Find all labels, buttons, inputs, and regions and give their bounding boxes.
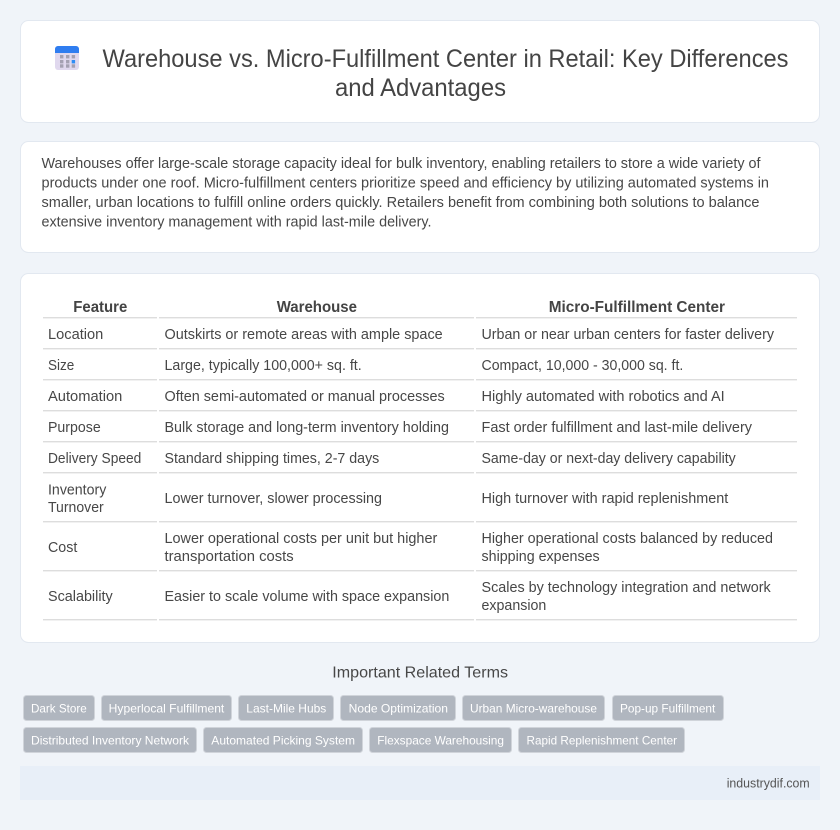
row: scalability: Scalability (48, 589, 113, 605)
icon: calendar grid (55, 46, 79, 70)
tag: automated picking system: Automated Picking System (211, 733, 355, 747)
row: location: Urban or near urban centers for faster delivery (482, 327, 775, 343)
row: delivery speed: Delivery Speed (48, 451, 141, 467)
row: purpose: Fast order fulfillment and last-mile delivery (482, 420, 753, 436)
row: purpose: Purpose (48, 420, 101, 436)
tag: distributed inventory network: Distributed Inventory Network (31, 733, 190, 747)
panel: introduction text: Warehouses offer large-scale storage capacity ideal for bulk inventory, enabling retailers to store a wide variety of (42, 156, 761, 172)
row: location: Outskirts or remote areas with ample space (164, 327, 443, 343)
tag: flexspace warehousing: Flexspace Warehousing (377, 733, 504, 747)
row: size: Large, typically 100,000+ sq. ft. (164, 358, 362, 374)
row: cost: Higher operational costs balanced by reduced (482, 531, 773, 547)
table header row: Warehouse (277, 299, 357, 316)
row: inventory turnover: Turnover (48, 500, 104, 516)
row: automation: Often semi-automated or manual processes (164, 389, 445, 405)
heading: important related terms: Important Related Terms (332, 664, 508, 682)
table header row (73, 299, 725, 316)
row: purpose (48, 420, 753, 436)
tag: last-mile hubs: Last-Mile Hubs (246, 701, 326, 715)
tag: node optimization (340, 696, 456, 720)
row: inventory turnover (48, 482, 728, 516)
row: delivery speed: Same-day or next-day delivery capability (482, 451, 736, 467)
tag: automated picking system (204, 728, 362, 752)
title: and Advantages (335, 74, 506, 102)
row: purpose: Bulk storage and long-term inventory holding (164, 420, 449, 436)
row: scalability: expansion (482, 598, 546, 614)
row: inventory turnover: High turnover with rapid replenishment (482, 491, 728, 507)
panel: introduction text (20, 142, 820, 252)
tag: hyperlocal fulfillment: Hyperlocal Fulfillment (109, 701, 225, 715)
tag: urban micro-warehouse: Urban Micro-warehouse (470, 701, 597, 715)
tag: distributed inventory network (24, 728, 196, 752)
row: automation (48, 389, 725, 405)
row: scalability: Easier to scale volume with space expansion (164, 589, 449, 605)
footer bar: industrydif.com (727, 775, 810, 790)
panel: introduction text: smaller, urban locations to fulfill online orders quickly. Retailers benefit from combining both solutions to balance (42, 195, 759, 211)
panel: introduction text: products under one roof. Micro-fulfillment centers prioritize speed and efficiency by utilizing automated systems in (42, 176, 769, 192)
row: size (48, 358, 683, 374)
table row lines (43, 317, 797, 620)
panel: introduction text: extensive inventory management with rapid last-mile delivery. (42, 214, 432, 230)
tag: pop-up fulfillment (612, 696, 724, 720)
row: size: Compact, 10,000 - 30,000 sq. ft. (482, 358, 683, 374)
tag: dark store: Dark Store (31, 701, 87, 715)
row: automation: Highly automated with robotics and AI (482, 389, 725, 405)
title: Warehouse vs. Micro-Fulfillment Center in Retail: Key Differences (102, 45, 788, 73)
tag: pop-up fulfillment: Pop-up Fulfillment (620, 701, 716, 715)
panel: comparison table (20, 274, 820, 642)
tag: rapid replenishment center (518, 728, 684, 752)
row: location: Location (48, 327, 103, 343)
row: automation: Automation (48, 389, 122, 405)
row: cost: transportation costs (164, 549, 294, 565)
related terms tags (24, 696, 724, 752)
tag: last-mile hubs (238, 696, 334, 720)
row: inventory turnover: Lower turnover, slower processing (164, 491, 382, 507)
row: delivery speed: Standard shipping times, 2-7 days (164, 451, 379, 467)
row: inventory turnover: Inventory (48, 482, 107, 498)
tag: flexspace warehousing (370, 728, 512, 752)
row: size: Size (48, 358, 74, 374)
tag: hyperlocal fulfillment (102, 696, 232, 720)
row: cost: Cost (48, 540, 77, 556)
row: scalability (48, 580, 772, 614)
table header row: Feature (73, 299, 128, 316)
row: cost: shipping expenses (482, 549, 600, 565)
row: delivery speed (48, 451, 736, 467)
tag: urban micro-warehouse (462, 696, 604, 720)
row: cost (48, 531, 773, 565)
row: cost: Lower operational costs per unit but higher (164, 531, 437, 547)
table header row: Micro-Fulfillment Center (549, 299, 725, 316)
panel: title header (20, 20, 820, 122)
row: scalability: Scales by technology integration and network (482, 580, 772, 596)
title (102, 45, 788, 102)
row: location (48, 327, 775, 343)
tag: rapid replenishment center: Rapid Replenishment Center (526, 733, 677, 747)
tag: node optimization: Node Optimization (349, 701, 448, 715)
footer bar (20, 766, 820, 800)
tag: dark store (24, 696, 94, 720)
